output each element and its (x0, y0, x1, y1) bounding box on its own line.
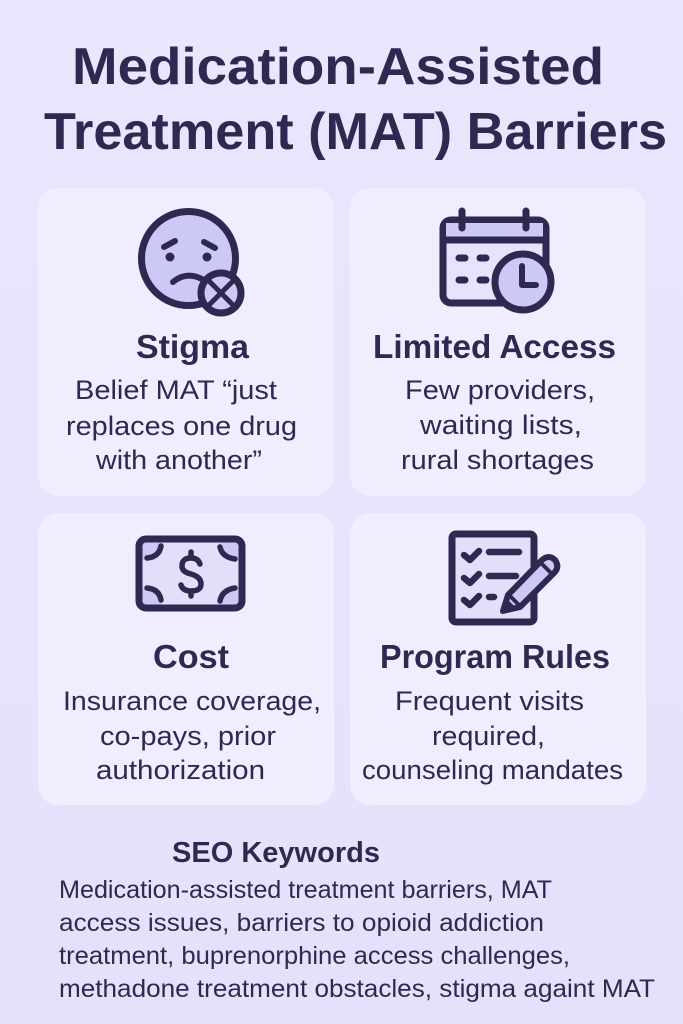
heading: program rules: Program Rules (380, 638, 610, 675)
text: seo keywords list: treatment, buprenorphine access challenges, (59, 942, 570, 970)
text: seo keywords list: Medication-assisted treatment barriers, MAT (59, 876, 552, 904)
icon: checklist with pencil (452, 534, 557, 622)
icon: sad face with x (142, 212, 241, 313)
text: seo keywords list (59, 876, 655, 1003)
text: program rules description: Frequent visits (395, 686, 584, 716)
text: limited access description (401, 375, 595, 475)
icon: dollar bill (139, 539, 242, 608)
text: stigma description: replaces one drug (66, 411, 297, 441)
text: seo keywords list: access issues, barriers to opioid addiction (59, 909, 544, 937)
text: program rules description (362, 686, 623, 785)
heading: cost: Cost (153, 638, 229, 675)
heading: seo keywords: SEO Keywords (172, 837, 380, 869)
panel: stigma (38, 188, 334, 496)
title (44, 38, 667, 161)
title: Medication-Assisted (72, 38, 604, 96)
text: cost description: co-pays, prior (100, 721, 276, 751)
text: limited access description: waiting lists, (419, 410, 582, 440)
text: stigma description (66, 375, 297, 475)
text: cost description: Insurance coverage, (63, 686, 321, 716)
panel: program rules (350, 513, 646, 805)
text: cost description: authorization (96, 755, 265, 785)
icon: calendar with clock (443, 211, 551, 310)
text: limited access description: Few providers, (405, 375, 595, 405)
text: stigma description: with another” (95, 445, 262, 475)
text: program rules description: counseling mandates (362, 755, 623, 785)
heading: limited access: Limited Access (373, 328, 616, 365)
text: limited access description: rural shortages (401, 445, 594, 475)
text: seo keywords list: methadone treatment obstacles, stigma againt MAT (59, 975, 655, 1003)
text: stigma description: Belief MAT “just (75, 375, 278, 405)
icon: pencil (503, 557, 557, 611)
text: program rules description: required, (432, 721, 545, 751)
panel: cost (38, 513, 334, 805)
text: cost description (63, 686, 321, 785)
panel: limited access (350, 188, 646, 496)
heading: stigma: Stigma (136, 328, 250, 365)
title: Treatment (MAT) Barriers (44, 103, 667, 161)
